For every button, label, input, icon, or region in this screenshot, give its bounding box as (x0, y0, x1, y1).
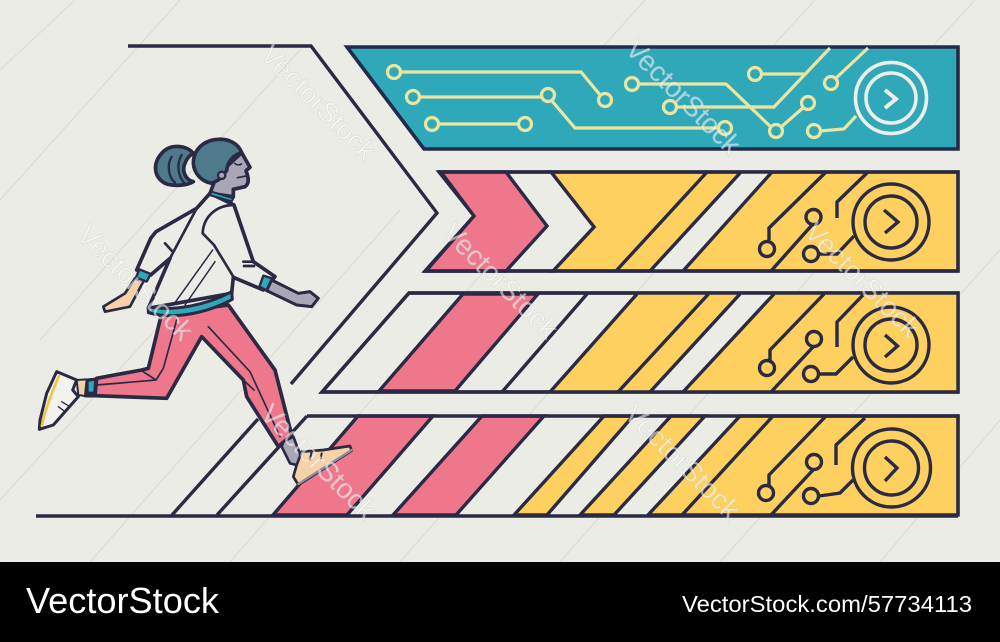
icon: target arrow row 2 (853, 184, 929, 260)
panel: yellow banner row 3 (322, 293, 958, 392)
watermarks: VectorStock (255, 398, 383, 526)
watermarks: VectorStock (437, 217, 565, 345)
figure: running woman (39, 139, 352, 485)
ponytail (156, 146, 193, 185)
panel: yellow banner row 4 (172, 416, 958, 515)
rear ankle and cuff (77, 378, 97, 397)
rear shoe (39, 372, 78, 429)
large chevron outline with top line (128, 46, 437, 384)
front sock (282, 437, 302, 465)
watermarks: VectorStock (72, 219, 200, 347)
panel: teal circuit banner (347, 47, 958, 149)
icon: white target arrow (856, 62, 926, 134)
icon: target arrow row 3 (853, 307, 929, 383)
front hand and forearm (267, 280, 318, 307)
footer id: VectorStock.com/57734113 (682, 591, 972, 617)
pants (95, 305, 292, 447)
ground line (36, 514, 958, 518)
head and face (193, 139, 250, 197)
front shoe (293, 446, 352, 485)
teal collar and waistband (136, 192, 274, 316)
watermarks: VectorStock (619, 398, 747, 526)
watermarks (72, 33, 927, 526)
panel: yellow banner row 2 (425, 172, 958, 271)
footer logo: VectorStock (26, 580, 220, 621)
watermarks: VectorStock (255, 39, 383, 167)
watermarks: VectorStock (799, 216, 927, 344)
rear hand (103, 278, 143, 312)
jacket torso and arms (137, 193, 275, 308)
icon: target arrow row 4 (852, 429, 930, 507)
footer bar (0, 562, 1000, 642)
watermarks: VectorStock (620, 33, 748, 161)
